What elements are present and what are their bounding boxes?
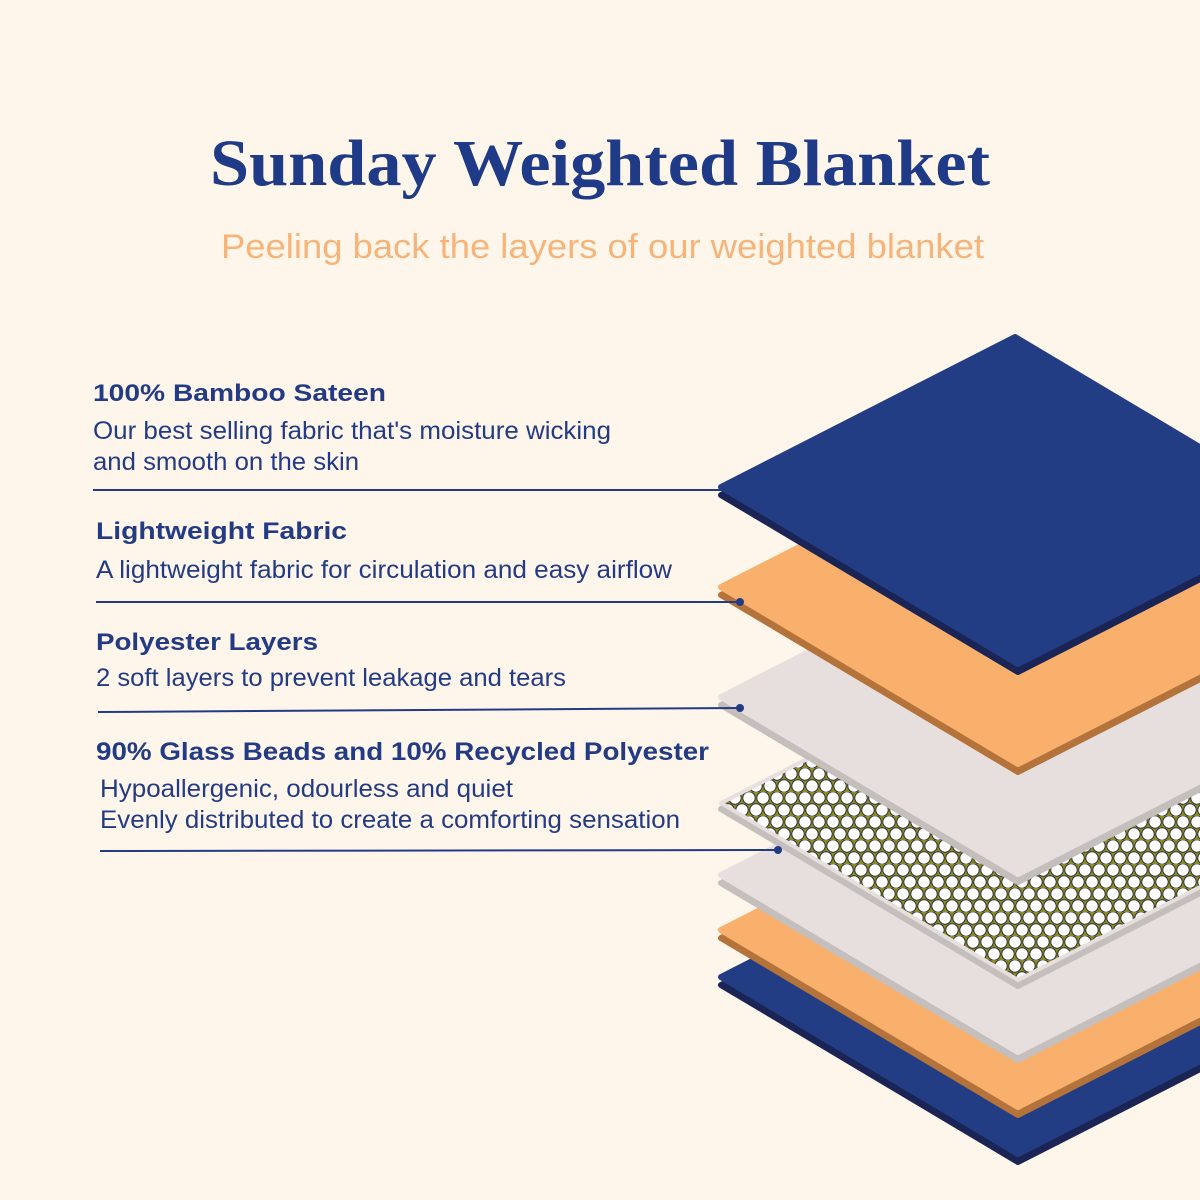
callout: bamboo sateen: 100% Bamboo Sateen [93,380,386,407]
layer: bottom polyester [721,725,1200,1060]
layer: bamboo sateen navy [721,337,1200,672]
layer: bottom navy [721,827,1200,1162]
callout: polyester layers [96,629,744,712]
subtitle: Peeling back the layers of our weighted blanket [221,228,985,266]
callout: glass beads: Evenly distributed to create a comforting sensation [100,806,680,834]
callout: lightweight fabric: A lightweight fabric for circulation and easy airflow [96,556,673,584]
callout: bamboo sateen: and smooth on the skin [93,448,359,476]
callout: lightweight fabric [96,518,744,606]
callout: glass beads: Hypoallergenic, odourless and quiet [100,775,513,803]
callout: bamboo sateen: Our best selling fabric that's moisture wicking [93,417,611,445]
layer: lightweight fabric orange [721,437,1200,772]
callout: polyester layers: 2 soft layers to prevent leakage and tears [96,664,566,692]
callout: glass beads [96,738,782,854]
callout: polyester layers: Polyester Layers [96,629,318,656]
callout: lightweight fabric: Lightweight Fabric [96,518,347,545]
callout: bamboo sateen [93,380,722,490]
layer: top polyester [721,547,1200,882]
layer: glass beads [721,653,1200,986]
title: Sunday Weighted Blanket [210,127,990,200]
layer stack illustration [721,337,1200,1162]
callout: glass beads: 90% Glass Beads and 10% Recycled Polyester [96,738,709,766]
layer: bottom orange [721,780,1200,1115]
